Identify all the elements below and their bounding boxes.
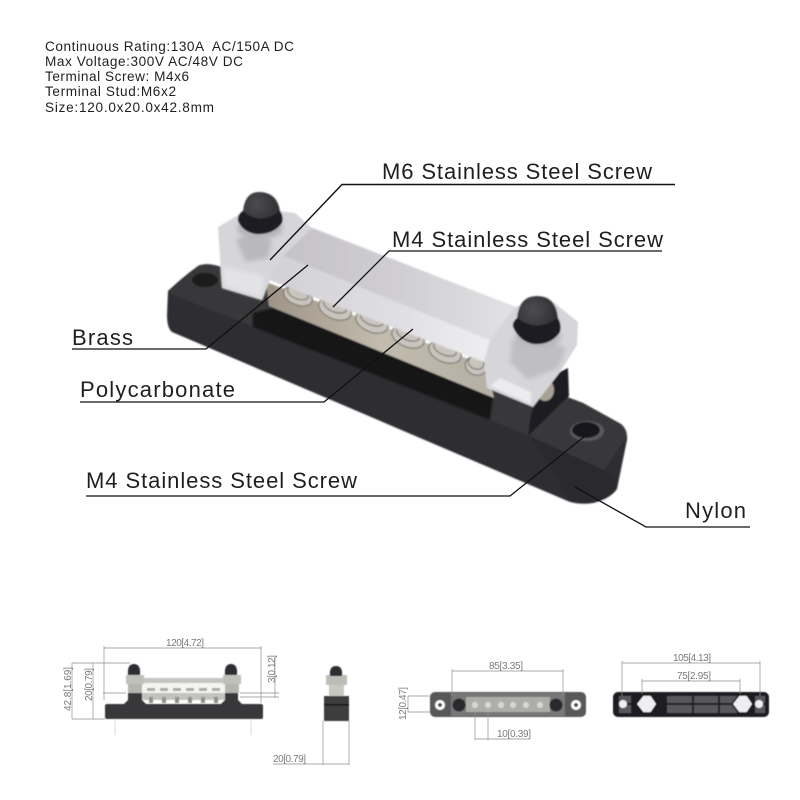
specifications text block: Size:120.0x20.0x42.8mm [45,100,214,115]
specifications text block: Terminal Screw: M4x6 [45,69,189,84]
specifications text block: Terminal Stud:M6x2 [45,84,176,99]
drawing: top view: 10[0.39] [497,729,531,740]
specifications text block [45,39,294,115]
right terminal and post [528,368,569,436]
right post cap [513,296,561,348]
drawing: top view [398,661,586,740]
drawing: front view: 120[4.72] [166,638,204,649]
dark slot [253,308,493,420]
drawing: side view: 20[0.79] [273,754,306,765]
label: M6 stainless steel screw: M6 Stainless Steel Screw [382,159,652,184]
mounting hole right [570,421,604,441]
cover top face [283,228,515,340]
drawing: top view: 12[0.47] [398,687,409,720]
drawing: bottom view: 75[2.95] [677,671,711,682]
drawing: bottom view [613,653,769,717]
cover lower lip [270,256,490,362]
label: brass: Brass [72,325,133,350]
specifications text block: Continuous Rating:130A AC/150A DC [45,39,294,54]
mounting hole left [192,273,218,287]
label: M4 stainless steel screw lower: M4 Stainless Steel Screw [86,468,357,493]
brass bar [266,282,494,398]
label: nylon: Nylon [685,498,746,523]
drawing: front view: 3[0.12] [267,655,278,683]
nylon base [167,264,627,504]
drawing: top view: 85[3.35] [489,661,523,672]
polycarbonate cover [218,208,578,407]
leader lines [72,184,750,527]
drawing: side view [273,666,349,765]
drawing: front view: 20[0.79] [84,668,95,701]
label: M4 stainless steel screw upper: M4 Stainless Steel Screw [392,227,663,252]
specifications text block: Max Voltage:300V AC/48V DC [45,54,243,69]
drawing: front view: 42.8[1.69] [63,667,74,711]
left post cap [237,192,283,239]
label: polycarbonate: Polycarbonate [80,377,235,402]
drawing: front view [63,638,279,735]
product photo: bus bar [167,192,627,504]
terminal screws [281,282,490,378]
drawing: bottom view: 105[4.13] [673,653,711,664]
